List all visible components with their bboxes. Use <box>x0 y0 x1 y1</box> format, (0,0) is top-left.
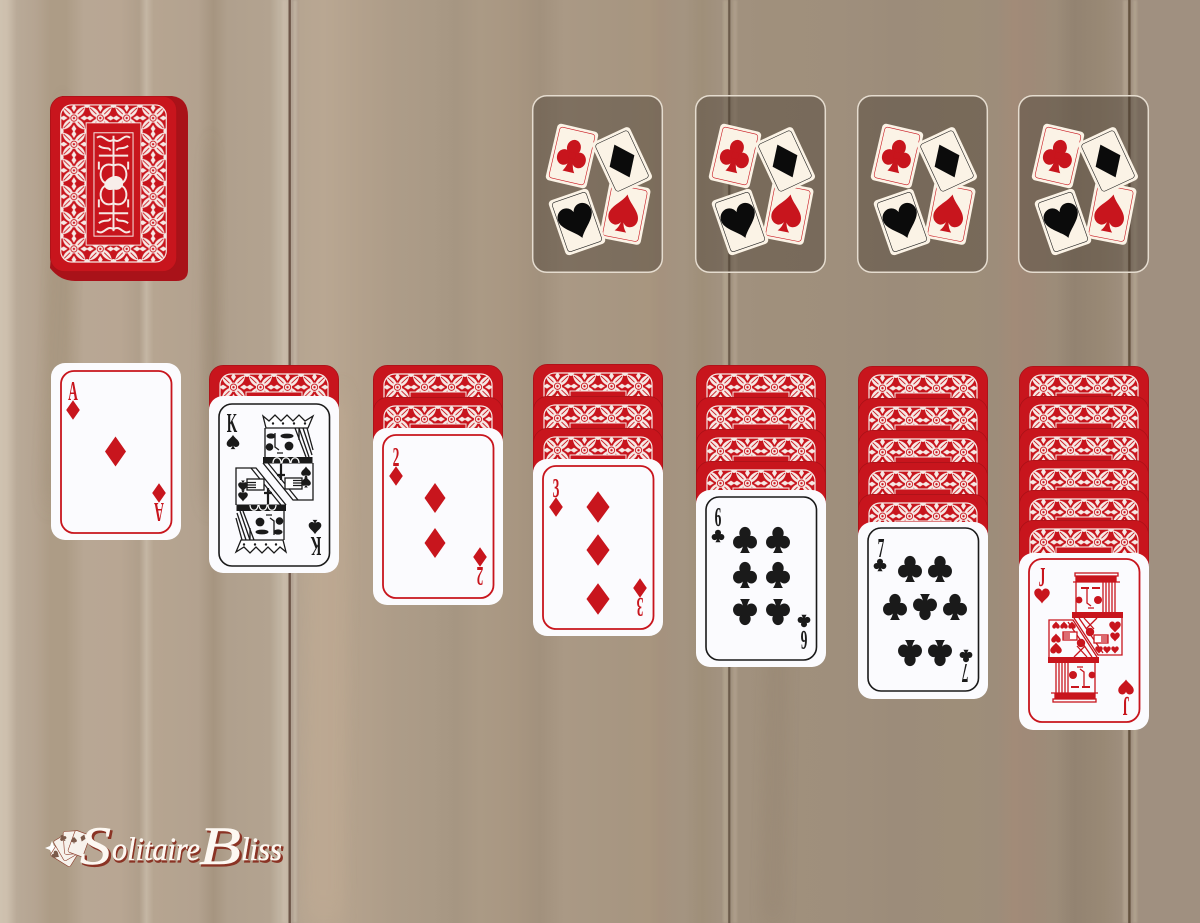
tableau column 4: three face-down cards and three of diamonds: 3 <box>637 592 643 622</box>
tableau column 7: six face-down cards and jack of hearts <box>1019 366 1149 730</box>
tableau column 5: four face-down cards and six of clubs <box>696 365 826 667</box>
foundation slot 2 <box>696 96 825 272</box>
tableau column 1: ace of diamonds: A <box>154 497 164 527</box>
foundation slot 1 <box>533 96 662 272</box>
tableau column 1: ace of diamonds <box>51 363 181 540</box>
tableau column 5: four face-down cards and six of clubs: 6 <box>715 502 722 532</box>
tableau column 7: six face-down cards and jack of hearts: J <box>1122 691 1129 721</box>
foundation slot 4 <box>1019 96 1148 272</box>
tableau column 4: three face-down cards and three of diamonds <box>533 364 663 636</box>
foundation slot 3 <box>858 96 987 272</box>
stock deck of face-down cards <box>50 96 188 281</box>
tableau column 2: one face-down card and king of spades: K <box>310 531 321 561</box>
tableau column 3: two face-down cards and two of diamonds: 2 <box>393 442 399 472</box>
tableau column 3: two face-down cards and two of diamonds <box>373 365 503 605</box>
tableau column 6: five face-down cards and seven of clubs: 7 <box>878 533 885 563</box>
tableau column 6: five face-down cards and seven of clubs: 7 <box>961 658 968 688</box>
wordmark shadow: B <box>201 818 243 878</box>
wordmark shadow <box>82 818 284 878</box>
tableau column 4: three face-down cards and three of diamonds: 3 <box>553 473 559 503</box>
wordmark: S <box>80 816 111 876</box>
wordmark shadow: liss <box>243 834 284 870</box>
tableau column 2: one face-down card and king of spades: K <box>227 408 238 438</box>
tableau column 3: two face-down cards and two of diamonds: 2 <box>477 561 483 591</box>
wordmark shadow: olitaire <box>113 834 201 870</box>
wordmark: olitaire <box>112 832 200 868</box>
tableau column 2: one face-down card and king of spades <box>209 365 339 573</box>
wordmark shadow: S <box>82 818 113 878</box>
tableau column 6: five face-down cards and seven of clubs <box>858 366 988 699</box>
logo: Solitaire Bliss <box>45 816 284 878</box>
tableau column 1: ace of diamonds: A <box>68 376 78 406</box>
tableau column 5: four face-down cards and six of clubs: 6 <box>800 625 807 655</box>
wordmark <box>80 816 282 876</box>
wordmark: B <box>199 816 241 876</box>
tableau column 7: six face-down cards and jack of hearts: J <box>1039 562 1046 592</box>
wordmark: liss <box>241 832 282 868</box>
icon: fan of cards <box>45 830 90 867</box>
